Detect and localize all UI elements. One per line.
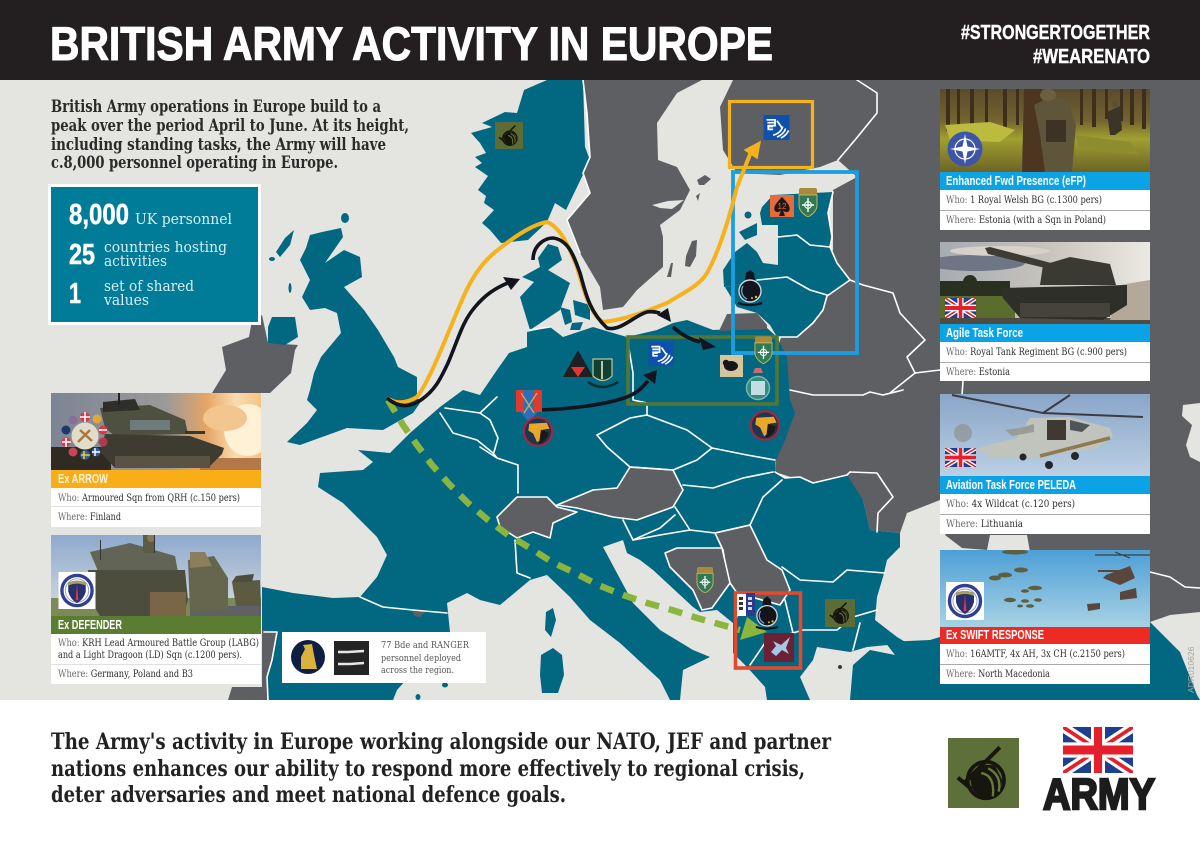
callout text: across the region. — [381, 665, 454, 676]
intro text: c.8,000 personnel operating in Europe. — [51, 153, 338, 172]
logo: British Army flag and wordmark — [1043, 727, 1155, 819]
arrow: green dashed route to North Macedonia — [388, 400, 767, 640]
stat: 25 countries: 25 — [69, 239, 95, 271]
icon: Union flag — [945, 298, 976, 318]
stat: 8,000 UK personnel: UK personnel — [135, 210, 232, 228]
card: Ex DEFENDER — [51, 534, 261, 684]
icon: pegasus maroon square — [764, 633, 794, 662]
map: United Kingdom — [269, 213, 420, 445]
stat: 25 countries — [69, 238, 227, 271]
heading band — [940, 324, 1150, 342]
photo: tanks on a road — [51, 535, 261, 616]
icon: bear badge Poland — [751, 411, 779, 440]
map: Caspian sea — [1182, 403, 1200, 462]
arrow: black route to Poland — [673, 327, 716, 350]
footer text: nations enhances our ability to respond more effectively to regional crisis, — [51, 756, 805, 782]
icon: Ranger badge — [334, 641, 369, 675]
who and where rows: and a Light Dragoon (LD) Sqn (c.1200 pers). — [58, 650, 242, 661]
map: Ireland — [212, 315, 298, 393]
heading band: Ex DEFENDER: Ex DEFENDER — [58, 617, 122, 632]
stat: 1 set of shared values: set of shared — [104, 277, 194, 295]
who and where rows: Where: North Macedonia — [946, 669, 1050, 680]
stat: 1 set of shared values: values — [103, 291, 149, 309]
who and where rows: Where: Estonia — [946, 367, 1010, 378]
arrow: black route through Denmark — [533, 238, 671, 329]
wordmark: ARMY — [1043, 770, 1155, 819]
icon: RAF crown badge Lithuania — [738, 270, 762, 305]
map: Bosnia — [665, 548, 730, 610]
icon: Union flag — [1063, 727, 1133, 773]
stat: 1 set of shared values — [69, 277, 194, 310]
stat: 8,000 UK personnel: 8,000 — [69, 199, 129, 231]
callout text: personnel deployed — [381, 653, 461, 664]
icon: crossed swords red and blue shield — [516, 390, 542, 422]
arrow: black route Germany to Poland — [538, 370, 657, 410]
photo: tank on field — [940, 242, 1150, 324]
who and where rows — [940, 195, 1150, 226]
heading band: Enhanced Fwd Presence (eFP) — [946, 173, 1086, 188]
callout text — [381, 640, 470, 676]
heading band: Aviation Task Force PELEDA — [946, 477, 1076, 492]
arrow: yellow route to Finland — [387, 142, 760, 402]
who and where rows — [940, 649, 1150, 680]
card: Aviation Task Force PELEDA — [940, 394, 1150, 534]
stat: 25 countries: countries hosting — [104, 238, 227, 256]
map: national borders — [264, 80, 1200, 700]
hashtags: #WEARENATO — [1033, 45, 1150, 68]
icon: air command Poland — [649, 342, 673, 366]
footer text — [51, 729, 831, 808]
map: Denmark — [520, 244, 590, 330]
icon: crown badge Macedonia — [756, 596, 778, 629]
heading band: Ex ARROW: Ex ARROW — [58, 471, 109, 486]
map: continental Europe — [262, 320, 907, 700]
map: Norway — [471, 80, 590, 243]
footer panel — [0, 700, 1200, 843]
footer text: deter adversaries and meet national defence goals. — [51, 782, 566, 808]
icon: US EUCOM badge — [946, 582, 984, 620]
photo: Wildcat helicopter — [940, 394, 1150, 476]
region box: Ex ARROW (yellow) — [730, 102, 812, 168]
map: Turkey — [850, 622, 1200, 700]
card: Ex ARROW — [51, 393, 272, 527]
hashtags — [961, 21, 1150, 68]
icon: 12 Brigade spade — [770, 195, 794, 217]
heading band — [940, 627, 1150, 644]
logo: Army lion emblem — [948, 738, 1019, 808]
who and where rows — [51, 493, 261, 523]
icon: bear badge Germany — [524, 417, 552, 446]
icon: 12 Brigade spade: 12 — [778, 202, 787, 211]
footer text: The Army's activity in Europe working alongside our NATO, JEF and partner — [51, 729, 831, 755]
icons on the map — [495, 115, 855, 662]
icon: Army lion Norway — [495, 122, 523, 149]
callout text: 77 Bde and RANGER — [381, 640, 470, 651]
arrow: black route to Norway — [387, 277, 520, 406]
intro text: peak over the period April to June. At its height, — [51, 116, 409, 135]
region box: Ex DEFENDER (green) — [628, 337, 777, 404]
card: Enhanced Fwd Presence — [940, 89, 1150, 230]
who and where rows — [940, 499, 1150, 530]
stat: 1 set of shared values: 1 — [69, 278, 81, 310]
map: Estonia — [739, 192, 833, 247]
stat: 8,000 UK personnel — [69, 199, 232, 231]
reference code: ADR010626 — [1186, 646, 1196, 693]
heading band: Agile Task Force — [946, 325, 1023, 340]
map: Sweden — [567, 80, 711, 310]
icon: 3 Division triangle — [563, 350, 593, 377]
photo: soldiers in forest — [940, 89, 1150, 172]
stat: 25 countries: activities — [104, 252, 167, 270]
icon: Union flag — [945, 448, 976, 467]
heading band: Ex ARROW — [51, 470, 261, 488]
map: Serbia — [715, 525, 790, 605]
icon: Army lion Bulgaria — [825, 599, 855, 627]
title: BRITISH ARMY ACTIVITY IN EUROPE — [50, 18, 773, 71]
icon: flag ring with emblem — [61, 412, 108, 460]
heading band: Ex DEFENDER — [51, 616, 261, 634]
card: Ex SWIFT RESPONSE — [940, 550, 1150, 684]
who and where rows: Where: Lithuania — [946, 519, 1023, 530]
intro text — [51, 97, 409, 172]
who and where rows: Who: Royal Tank Regiment BG (c.900 pers) — [946, 347, 1127, 358]
callout: 77 Bde and RANGER — [282, 632, 486, 683]
who and where rows: Who: 1 Royal Welsh BG (c.1300 pers) — [946, 195, 1102, 206]
map: Lithuania — [725, 277, 827, 337]
icon: flags Macedonia — [737, 593, 755, 616]
region box: Baltic deployments (blue) — [733, 172, 857, 353]
icon: green crowned badge Poland — [746, 368, 770, 400]
background panel: map sea — [0, 80, 1200, 700]
who and where rows: Where: Estonia (with a Sqn in Poland) — [946, 215, 1106, 226]
who and where rows: Who: KRH Lead Armoured Battle Group (LABG) — [58, 638, 259, 649]
map: Portugal — [228, 630, 277, 700]
card: Agile Task Force — [925, 242, 1150, 381]
who and where rows — [940, 347, 1150, 378]
map: Latvia — [723, 235, 850, 297]
map: eastern non-participating land (Finland, Russia, Belarus, Ukraine) — [720, 80, 1200, 622]
heading band: Ex SWIFT RESPONSE — [946, 627, 1044, 642]
who and where rows: Where: Germany, Poland and B3 — [58, 669, 193, 680]
icon: NATO shield Bosnia — [697, 567, 713, 593]
header bar — [0, 0, 1200, 80]
map: Andorra — [412, 609, 425, 617]
map of Europe — [212, 80, 1200, 700]
intro text: including standing tasks, the Army will have — [51, 135, 386, 154]
hashtags: #STRONGERTOGETHER — [961, 21, 1150, 44]
stats panel — [50, 186, 260, 324]
icon: 77 Brigade badge — [291, 640, 325, 674]
photo: parachutes and helicopters — [940, 550, 1150, 627]
region box: Ex SWIFT RESPONSE (red) — [736, 593, 800, 668]
who and where rows: Where: Finland — [58, 512, 121, 523]
who and where rows — [51, 638, 261, 680]
who and where rows: Who: 16AMTF, 4x AH, 3x CH (c.2150 pers) — [946, 649, 1125, 660]
who and where rows: Who: 4x Wildcat (c.120 pers) — [946, 499, 1075, 510]
icon: green regimental badge — [588, 359, 618, 387]
icon: NATO badge — [948, 132, 982, 166]
photo: Challenger tank firing with national flags — [51, 393, 261, 470]
map: Austria — [557, 467, 683, 520]
who and where rows: Who: Armoured Sqn from QRH (c.150 pers) — [58, 493, 240, 504]
icon: air command Finland — [764, 115, 789, 140]
map: Kaliningrad — [719, 313, 767, 331]
intro text: British Army operations in Europe build to a — [51, 97, 381, 116]
icon: tan boar square — [720, 355, 743, 377]
icon: NATO shield Poland — [755, 336, 772, 364]
map: Switzerland — [497, 497, 577, 538]
icon: US EUCOM badge — [58, 572, 96, 609]
map: Corsica, Sardinia and Balearic islands — [416, 608, 842, 700]
icon: NATO shield Estonia — [799, 188, 817, 217]
